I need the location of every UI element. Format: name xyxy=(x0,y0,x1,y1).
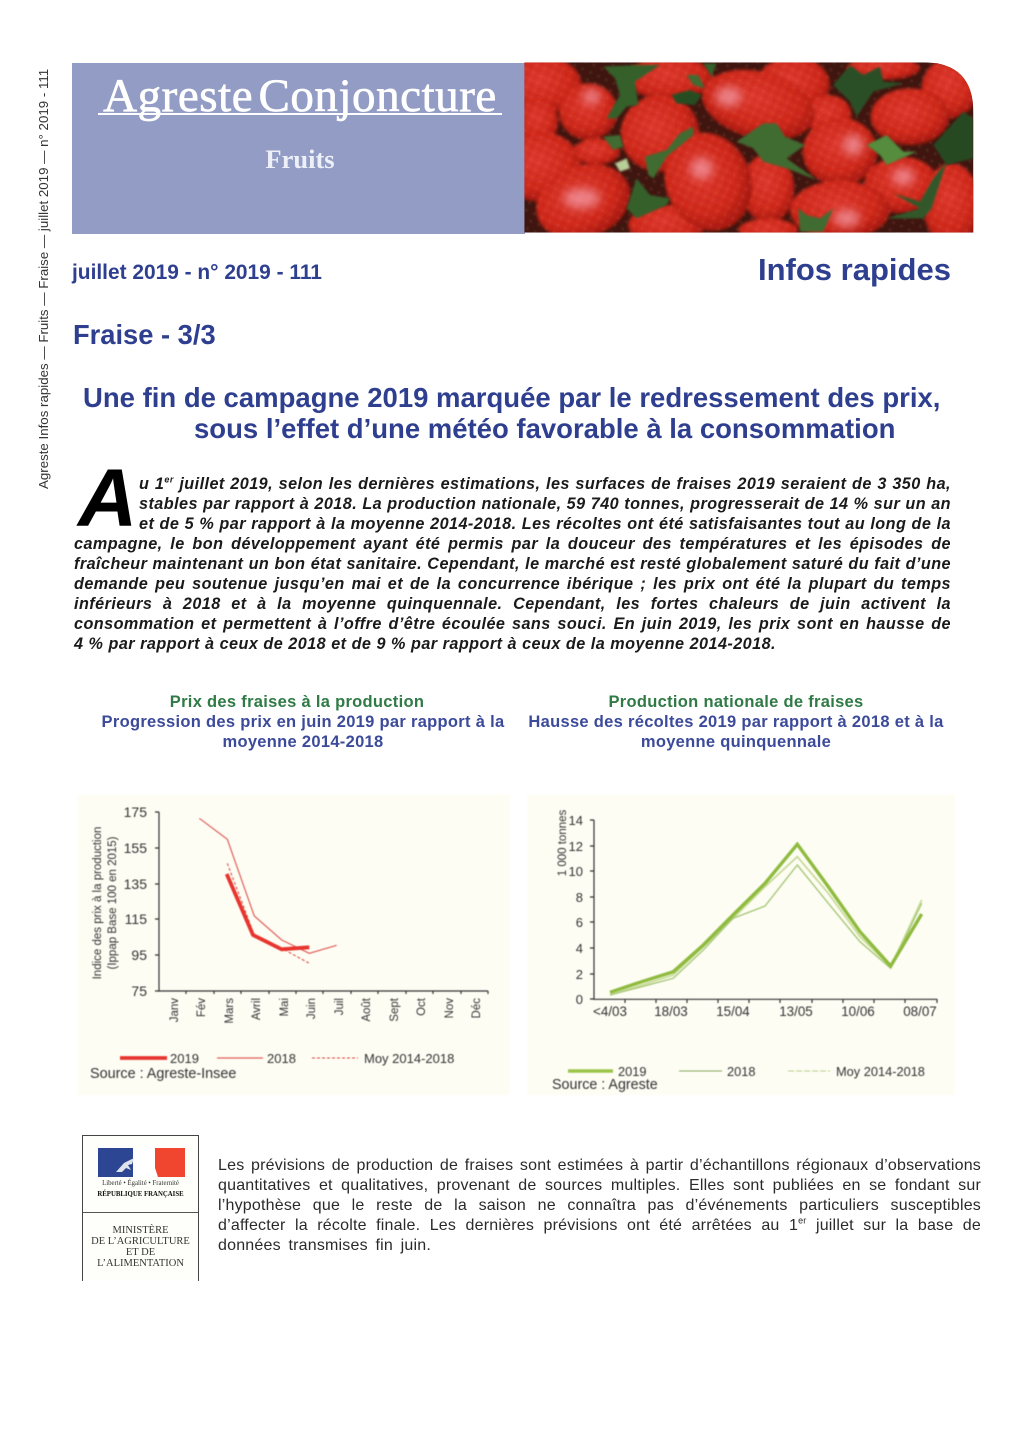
line chart: national production: 15/04 xyxy=(716,1004,750,1019)
right chart heading: Production nationale de fraises xyxy=(608,693,864,711)
left chart heading: Prix des fraises à la production xyxy=(170,693,424,711)
line chart: strawberry price index: Janv xyxy=(169,998,181,1022)
right chart heading xyxy=(528,693,944,751)
section name: Fruits xyxy=(265,144,335,174)
line chart: national production: 10 xyxy=(569,864,583,879)
methodology note: quantitatives et qualitatives, provenant de sources multiples. Elles sont publiées en se fondant sur xyxy=(218,1177,981,1194)
methodology note: données transmises fin juin. xyxy=(218,1237,431,1254)
line chart: strawberry price index: Moy 2014-2018 xyxy=(364,1051,454,1066)
left chart heading: moyenne 2014-2018 xyxy=(222,733,384,751)
line chart: strawberry price index: Source : Agreste-Insee xyxy=(90,1066,236,1082)
line chart: strawberry price index: 95 xyxy=(131,947,147,963)
line chart: strawberry price index: 2019 xyxy=(170,1051,199,1066)
line chart: strawberry price index: Juin xyxy=(306,998,318,1019)
line chart: strawberry price index: Août xyxy=(361,997,373,1022)
ministry name: DE L’AGRICULTURE xyxy=(91,1236,190,1247)
intro paragraph: stables par rapport à 2018. La production nationale, 59 740 tonnes, progresserait de 14 % sur un an xyxy=(139,495,951,513)
line chart: strawberry price index: Juil xyxy=(334,998,346,1015)
ministry name: L’ALIMENTATION xyxy=(97,1258,184,1269)
republic name: RÉPUBLIQUE FRANÇAISE xyxy=(97,1191,184,1198)
intro paragraph: u 1er juillet 2019, selon les dernières estimations, les surfaces de fraises 2019 seraient de 3 350 ha, xyxy=(139,475,951,493)
brand name: Agreste Conjoncture xyxy=(103,70,497,122)
line chart: national production: Source : Agreste xyxy=(552,1077,658,1093)
methodology note: d’affecter la récolte finale. Les dernières prévisions ont été arrêtées au 1er juillet sur la base de xyxy=(218,1216,981,1234)
line chart: strawberry price index: Déc xyxy=(471,998,483,1018)
line chart: national production: 2018 xyxy=(727,1064,755,1079)
line chart: national production: 14 xyxy=(569,813,583,828)
side text: Agreste Infos rapides — Fruits — Fraise — juillet 2019 — n° 2019 - 111 xyxy=(36,69,51,489)
republic name xyxy=(97,1178,184,1198)
intro paragraph: demande peu soutenue jusqu’en mai et de la concurrence ibérique ; les prix ont été la plupart du temps xyxy=(74,575,951,593)
line chart: national production: 4 xyxy=(576,941,583,956)
main title xyxy=(83,382,940,444)
line chart: strawberry price index: Indice des prix à la production xyxy=(92,827,104,979)
intro paragraph: et de 5 % par rapport à la moyenne 2014-2018. Les récoltes ont été satisfaisantes tout au long de la xyxy=(139,515,951,533)
main title: Une fin de campagne 2019 marquée par le redressement des prix, xyxy=(83,382,940,413)
intro paragraph: 4 % par rapport à ceux de 2018 et de 9 % par rapport à ceux de la moyenne 2014-2018. xyxy=(74,635,776,653)
intro paragraph: inférieurs à 2018 et à la moyenne quinquennale. Cependant, les fortes chaleurs de juin activent la xyxy=(74,595,951,613)
line chart: national production: 08/07 xyxy=(903,1004,937,1019)
ministry name: ET DE xyxy=(126,1247,155,1258)
line chart: national production: Moy 2014-2018 xyxy=(836,1064,925,1079)
line chart: strawberry price index: 135 xyxy=(124,876,147,892)
line chart: national production: 1 000 tonnes xyxy=(557,810,569,876)
line chart: strawberry price index: Oct xyxy=(416,997,428,1016)
intro paragraph: fraîcheur maintenant un bon état sanitaire. Cependant, le marché est resté globalement saturé du fait d’une xyxy=(74,555,951,573)
methodology note: l’hypothèse que le reste de la saison ne connaîtra pas d’événements particuliers susceptibles xyxy=(218,1197,981,1214)
header blue panel xyxy=(72,63,525,234)
line chart: national production: 13/05 xyxy=(779,1004,813,1019)
publication type: Infos rapides xyxy=(758,252,951,287)
line chart: strawberry price index xyxy=(78,796,510,1094)
line chart: strawberry price index: 175 xyxy=(124,804,147,820)
line chart: national production: 2 xyxy=(576,967,583,982)
line chart: strawberry price index: 2018 xyxy=(267,1051,296,1066)
line chart: national production: 0 xyxy=(576,992,583,1007)
ministry name xyxy=(91,1224,190,1269)
left chart heading: Progression des prix en juin 2019 par rapport à la xyxy=(102,713,504,731)
methodology note xyxy=(218,1157,981,1254)
methodology note: Les prévisions de production de fraises sont estimées à partir d’échantillons régionaux d’observations xyxy=(218,1157,981,1174)
line chart: strawberry price index: Fév xyxy=(196,998,208,1017)
line chart: strawberry price index: Mars xyxy=(224,998,236,1024)
right chart heading: Hausse des récoltes 2019 par rapport à 2018 et à la xyxy=(528,713,944,731)
line chart: national production: 2019 xyxy=(618,1064,646,1079)
line chart: national production: 6 xyxy=(576,915,583,930)
line chart: strawberry price index: Nov xyxy=(444,998,456,1018)
intro paragraph xyxy=(74,475,951,653)
drop cap: A xyxy=(78,453,137,544)
ministry logo xyxy=(82,1135,199,1281)
header banner xyxy=(72,63,525,234)
line chart: strawberry price index: Avril xyxy=(251,998,263,1020)
line chart: strawberry price index: Mai xyxy=(279,998,291,1017)
line chart: strawberry price index: 75 xyxy=(131,983,147,999)
main title: sous l’effet d’une météo favorable à la consommation xyxy=(194,413,895,444)
product heading: Fraise - 3/3 xyxy=(73,319,216,350)
ministry name: MINISTÈRE xyxy=(112,1225,168,1236)
line chart: national production xyxy=(528,796,954,1094)
line chart: strawberry price index: 115 xyxy=(125,911,147,927)
line chart: strawberry price index: 155 xyxy=(124,840,147,856)
line chart: strawberry price index: (Ippap Base 100 en 2015) xyxy=(107,836,119,970)
right chart heading: moyenne quinquennale xyxy=(641,733,831,751)
intro paragraph: consommation et permettent à l’offre d’être écoulée sans souci. En juin 2019, les prix sont en hausse de xyxy=(74,615,951,633)
logo divider xyxy=(83,1212,198,1213)
line chart: strawberry price index: Sept xyxy=(389,997,401,1022)
republic name: Liberté • Égalité • Fraternité xyxy=(102,1180,179,1187)
icon: french republic flag xyxy=(98,1148,185,1177)
left chart heading xyxy=(102,693,504,751)
line chart: national production: 12 xyxy=(569,839,583,854)
line chart: national production: 18/03 xyxy=(654,1004,688,1019)
line chart: national production: 10/06 xyxy=(841,1004,875,1019)
strawberries photo xyxy=(524,62,974,233)
line chart: national production: 8 xyxy=(576,890,583,905)
line chart: national production: <4/03 xyxy=(593,1004,627,1019)
intro paragraph: campagne, le bon développement ayant été permis par la douceur des températures et les épisodes de xyxy=(74,535,951,553)
issue date: juillet 2019 - n° 2019 - 111 xyxy=(72,261,322,284)
